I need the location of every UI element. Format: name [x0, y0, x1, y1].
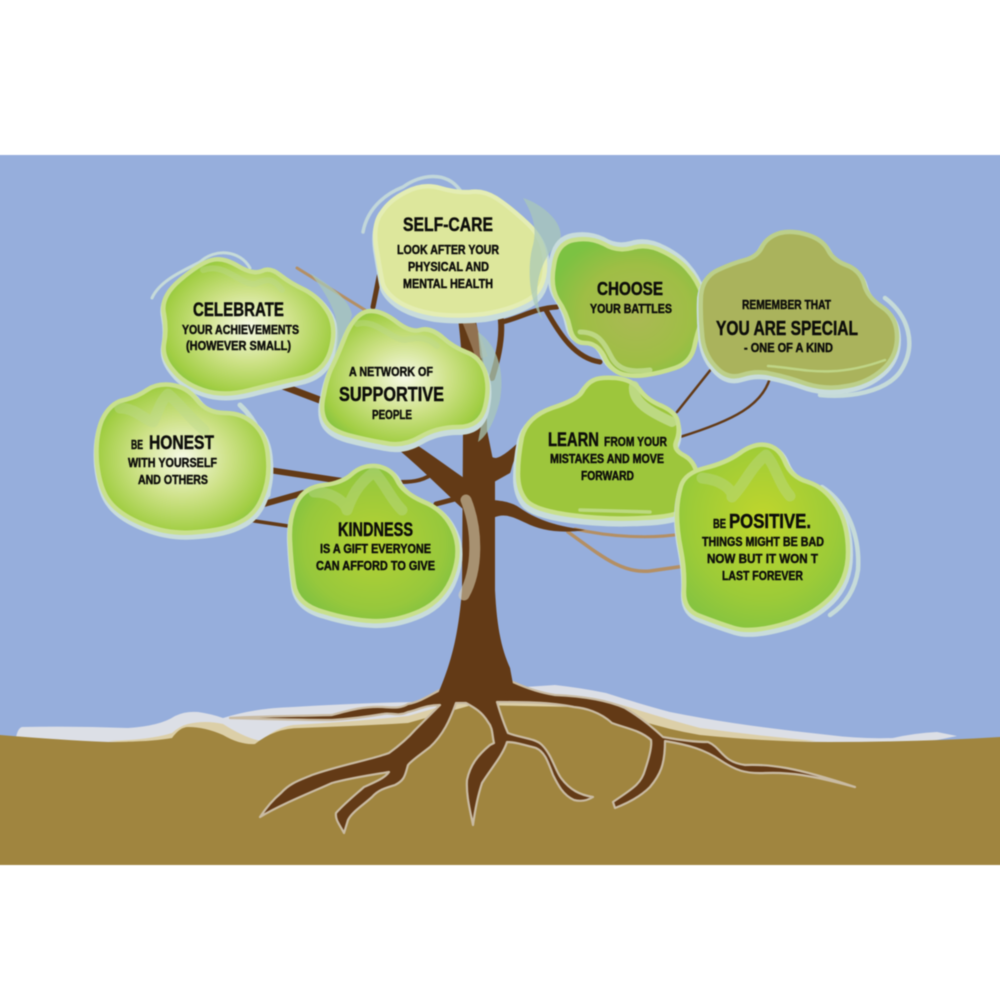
text: celebrate: (HOWEVER SMALL)	[186, 339, 291, 353]
ground with hill highlights	[0, 685, 1000, 865]
text: honest: BE	[131, 438, 143, 452]
roots	[230, 682, 855, 833]
text: positive: NOW BUT IT WON T	[707, 551, 818, 566]
text: choose	[590, 279, 672, 316]
text: kindness: IS A GIFT EVERYONE	[320, 542, 431, 556]
text: honest: HONEST	[149, 433, 214, 454]
cloud: celebrate	[152, 253, 334, 396]
text: honest: AND OTHERS	[138, 473, 208, 487]
text: self-care: PHYSICAL AND	[408, 260, 489, 274]
text: positive: LAST FOREVER	[722, 568, 803, 583]
text: supportive: PEOPLE	[372, 408, 412, 422]
branches	[248, 272, 770, 532]
text: kindness: CAN AFFORD TO GIVE	[316, 559, 435, 573]
thin tan branches	[297, 268, 685, 571]
cloud: learn	[517, 378, 698, 523]
text: positive	[702, 511, 824, 583]
text: self-care: LOOK AFTER YOUR	[397, 243, 499, 257]
text: honest: WITH YOURSELF	[128, 456, 217, 470]
text: supportive: SUPPORTIVE	[339, 384, 444, 406]
text: self-care: SELF-CARE	[403, 215, 493, 236]
cloud: self-care	[363, 176, 546, 320]
text: celebrate: CELEBRATE	[193, 300, 284, 321]
text: you are special: YOU ARE SPECIAL	[716, 318, 858, 340]
text: kindness	[316, 520, 435, 573]
trunk top tan overlay	[467, 318, 482, 358]
cloud: kindness	[290, 466, 475, 624]
text: positive: POSITIVE.	[729, 511, 811, 533]
cloud: you are special	[701, 232, 909, 396]
text: honest	[128, 433, 217, 487]
cloud: honest	[97, 385, 269, 536]
text: learn: FROM YOUR	[604, 435, 667, 449]
text: kindness: KINDNESS	[338, 520, 413, 541]
tree	[230, 268, 855, 833]
trunk	[438, 318, 513, 702]
text: learn: MISTAKES AND MOVE	[550, 452, 664, 466]
cloud: positive	[677, 445, 858, 633]
text: self-care: MENTAL HEALTH	[403, 277, 493, 291]
text: you are special: - ONE OF A KIND	[744, 341, 833, 355]
text: celebrate: YOUR ACHIEVEMENTS	[182, 323, 299, 337]
text: celebrate	[182, 300, 299, 353]
sky background	[0, 155, 1000, 755]
text: positive: THINGS MIGHT BE BAD	[702, 534, 824, 549]
text: learn	[548, 430, 667, 483]
text: you are special	[716, 297, 858, 355]
text: supportive: A NETWORK OF	[349, 365, 433, 379]
text: positive: BE	[713, 516, 726, 531]
text: choose: YOUR BATTLES	[590, 301, 672, 316]
tree infographic scene	[0, 155, 1000, 865]
text: choose: CHOOSE	[597, 279, 663, 299]
text: you are special: REMEMBER THAT	[742, 297, 831, 312]
text: self-care	[397, 215, 499, 291]
cloud: choose	[523, 198, 705, 376]
text: learn: FORWARD	[581, 469, 634, 483]
text: supportive	[339, 365, 444, 422]
cloud: supportive	[310, 273, 501, 448]
text: learn: LEARN	[548, 430, 599, 451]
